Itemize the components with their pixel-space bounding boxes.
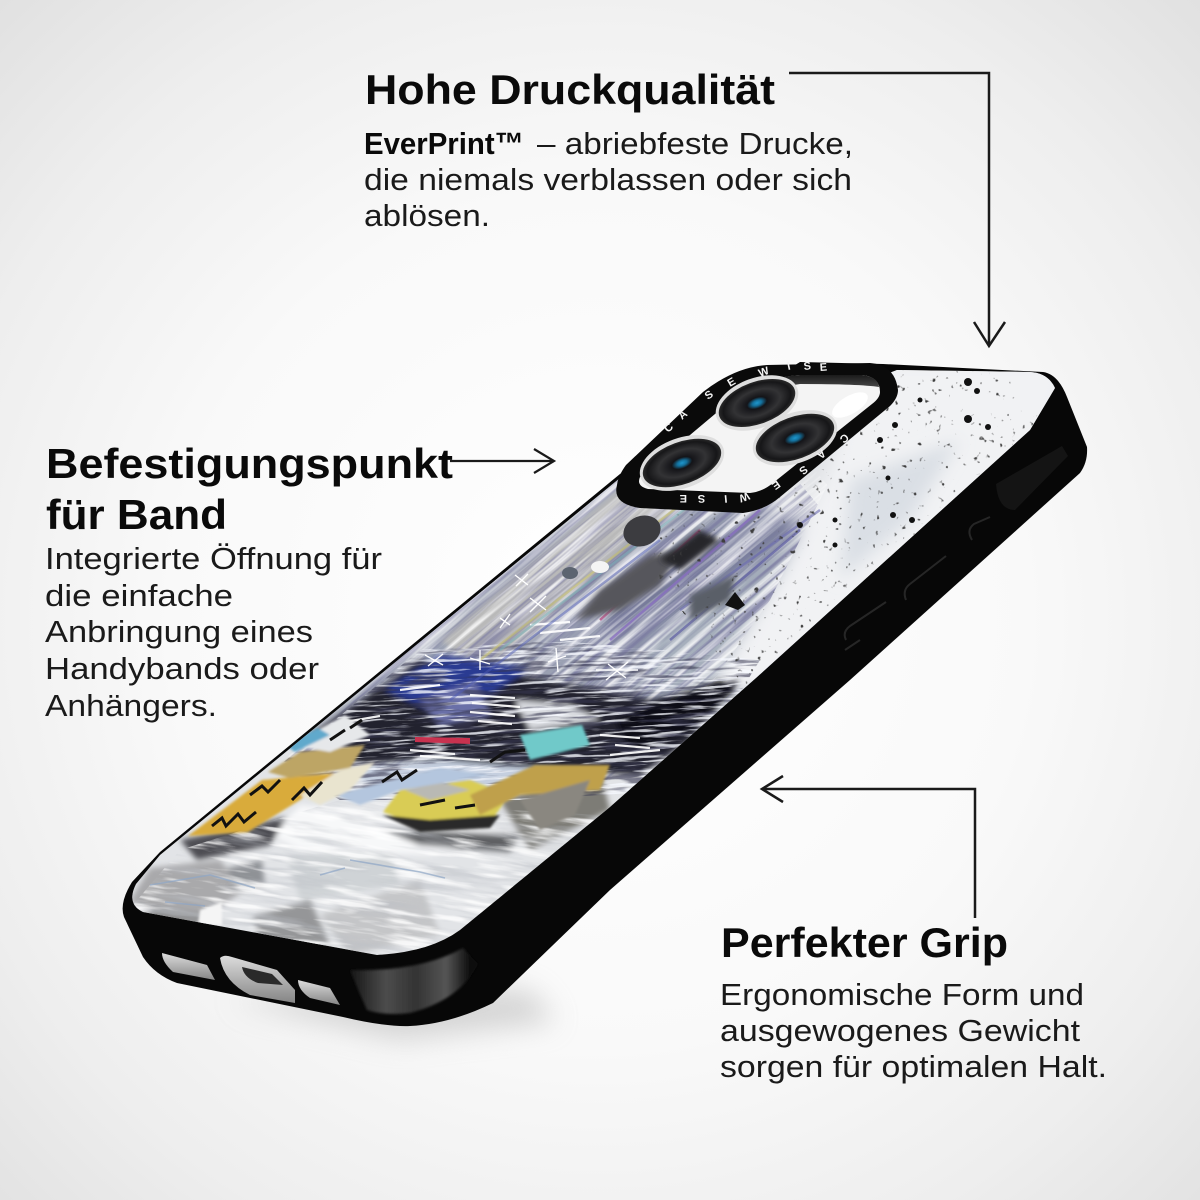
artwork: grey-lilac zone xyxy=(312,480,820,730)
body: print quality: die niemals verblassen oder sich xyxy=(364,162,852,197)
heading: strap attachment xyxy=(46,440,453,538)
artwork: dark city xyxy=(310,655,740,790)
body: grip: ausgewogenes Gewicht xyxy=(720,1013,1080,1048)
body: print quality: ablösen. xyxy=(364,198,490,233)
side switch highlight xyxy=(996,446,1068,510)
bump brand text lower: CASEWISE xyxy=(680,431,851,504)
artwork: snow blocks xyxy=(130,770,610,955)
case body xyxy=(123,362,1087,1026)
body: strap attachment xyxy=(45,541,382,723)
heading: print quality: Hohe Druckqualität xyxy=(365,66,775,113)
artwork: sparkle stars xyxy=(425,574,638,680)
left speaker xyxy=(162,953,215,980)
lens top xyxy=(708,365,806,441)
artwork: yellow taxis xyxy=(188,715,610,836)
printed artwork xyxy=(132,370,1055,955)
side buttons xyxy=(845,517,990,650)
artwork: dark paint blots xyxy=(562,510,735,620)
charging port xyxy=(220,956,295,1003)
right speaker xyxy=(298,980,340,1005)
artwork: white upper area xyxy=(700,360,1070,700)
bottom corner gloss xyxy=(350,948,478,1014)
body: grip: Ergonomische Form und xyxy=(720,977,1084,1012)
lens left xyxy=(632,424,732,502)
heading: grip: Perfekter Grip xyxy=(721,919,1008,966)
callout: print quality xyxy=(364,66,853,233)
bump inner clear area xyxy=(639,375,880,493)
body: strap attachment: Integrierte Öffnung für xyxy=(45,541,382,576)
callout: strap attachment xyxy=(45,440,453,723)
artwork: snow blue lines xyxy=(150,860,445,906)
heading: strap attachment: Befestigungspunkt xyxy=(46,440,453,487)
arrow: grip xyxy=(762,776,975,918)
camera bump xyxy=(616,360,898,513)
bump brand text upper: CASEWISE xyxy=(662,360,828,435)
body: print quality: EverPrint™ xyxy=(364,126,524,161)
arrow: print quality xyxy=(789,73,1005,346)
phone shadow xyxy=(230,990,555,1040)
bump frame xyxy=(616,363,898,513)
body: grip xyxy=(720,977,1107,1084)
heading: strap attachment: für Band xyxy=(46,491,227,538)
artwork: taxi black scribbles xyxy=(212,720,525,826)
body: strap attachment: Handybands oder xyxy=(45,651,319,686)
artwork: coloured streaks xyxy=(450,505,820,700)
body: grip: sorgen für optimalen Halt. xyxy=(720,1049,1107,1084)
bump inner top band xyxy=(760,375,879,388)
phone case xyxy=(122,362,1088,1026)
body: strap attachment: die einfache xyxy=(45,578,233,613)
body: print quality xyxy=(364,126,853,233)
artwork: streak textures xyxy=(288,480,824,780)
body: strap attachment: Anbringung eines xyxy=(45,614,313,649)
artwork: ink splatter xyxy=(644,370,1038,684)
body: strap attachment: Anhängers. xyxy=(45,688,217,723)
lens right xyxy=(745,399,845,477)
artwork: city window lights xyxy=(340,622,660,760)
callout: grip xyxy=(720,919,1107,1084)
body: print quality: – abriebfeste Drucke, xyxy=(537,126,853,161)
arrow: strap attachment xyxy=(450,449,554,473)
